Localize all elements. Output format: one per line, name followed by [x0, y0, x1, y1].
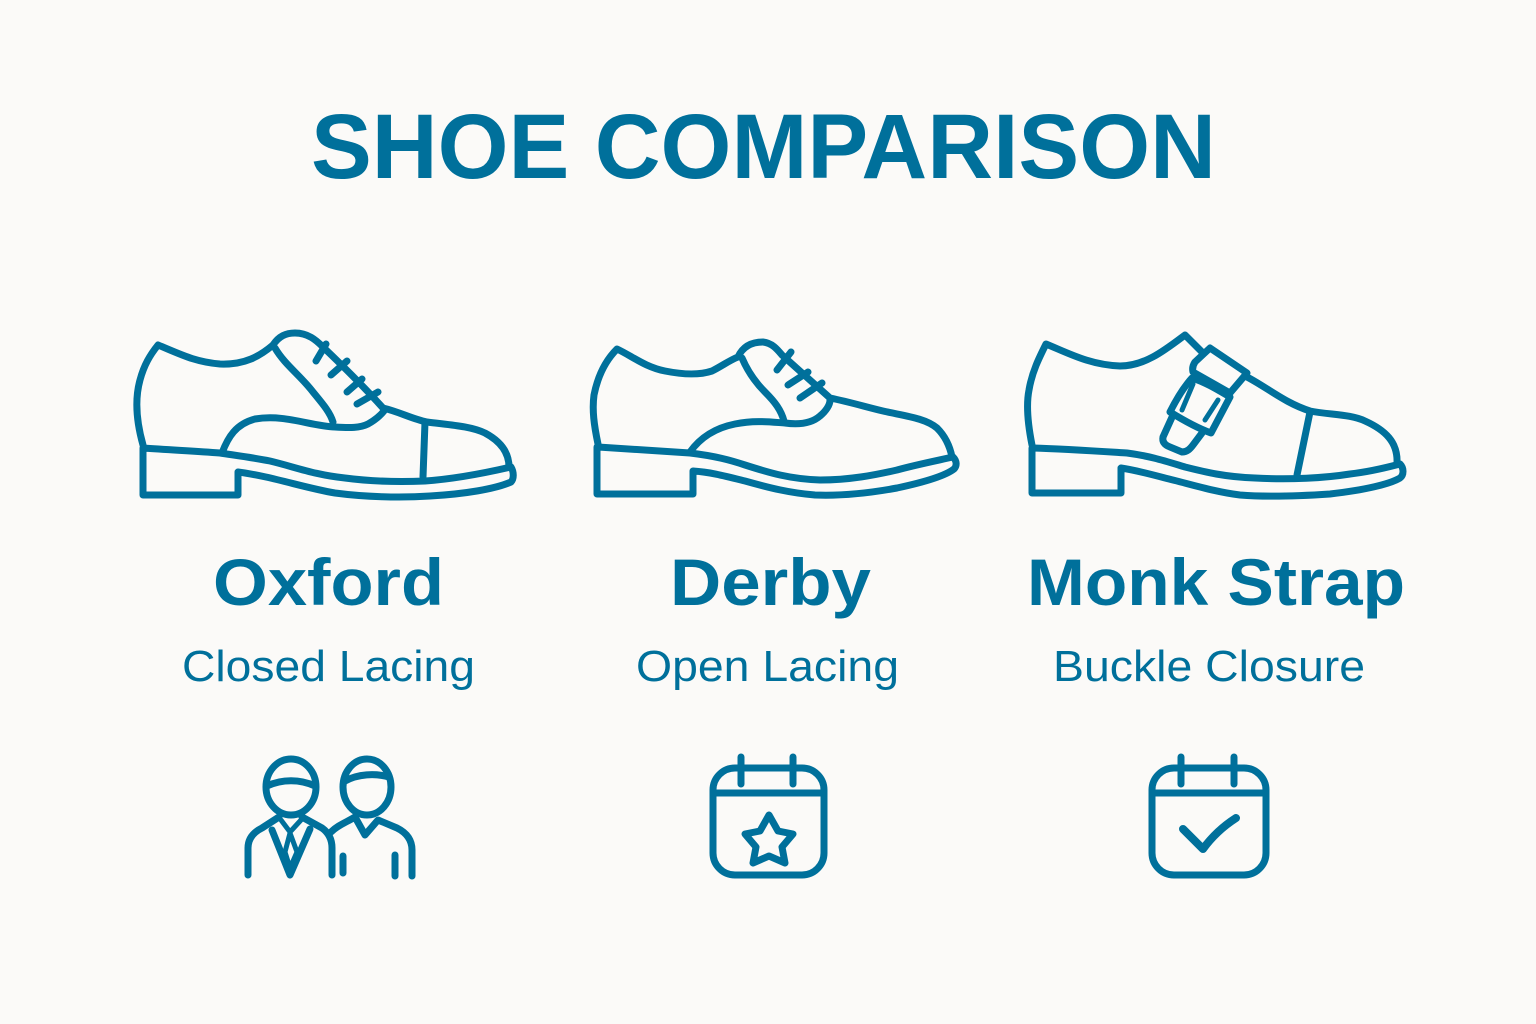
text: Open Lacing: Open Lacing	[636, 642, 899, 691]
title: SHOE COMPARISON	[311, 96, 1216, 198]
icon: calendar with star	[713, 757, 824, 875]
icon: Oxford shoe	[137, 333, 513, 497]
panel: Monk Strap	[1027, 335, 1405, 875]
text: Buckle Closure: Buckle Closure	[1053, 642, 1365, 691]
icon: two people	[248, 759, 412, 876]
panel: Derby	[593, 342, 956, 875]
text: Closed Lacing: Closed Lacing	[182, 642, 475, 691]
heading: Oxford: Oxford	[213, 545, 444, 619]
icon: Monk Strap shoe	[1028, 335, 1403, 496]
icon: Derby shoe	[593, 342, 956, 495]
icon: calendar with checkmark	[1152, 757, 1266, 875]
heading: Monk Strap: Monk Strap	[1027, 545, 1405, 619]
panel: Oxford	[137, 333, 513, 876]
heading: Derby: Derby	[670, 545, 871, 619]
